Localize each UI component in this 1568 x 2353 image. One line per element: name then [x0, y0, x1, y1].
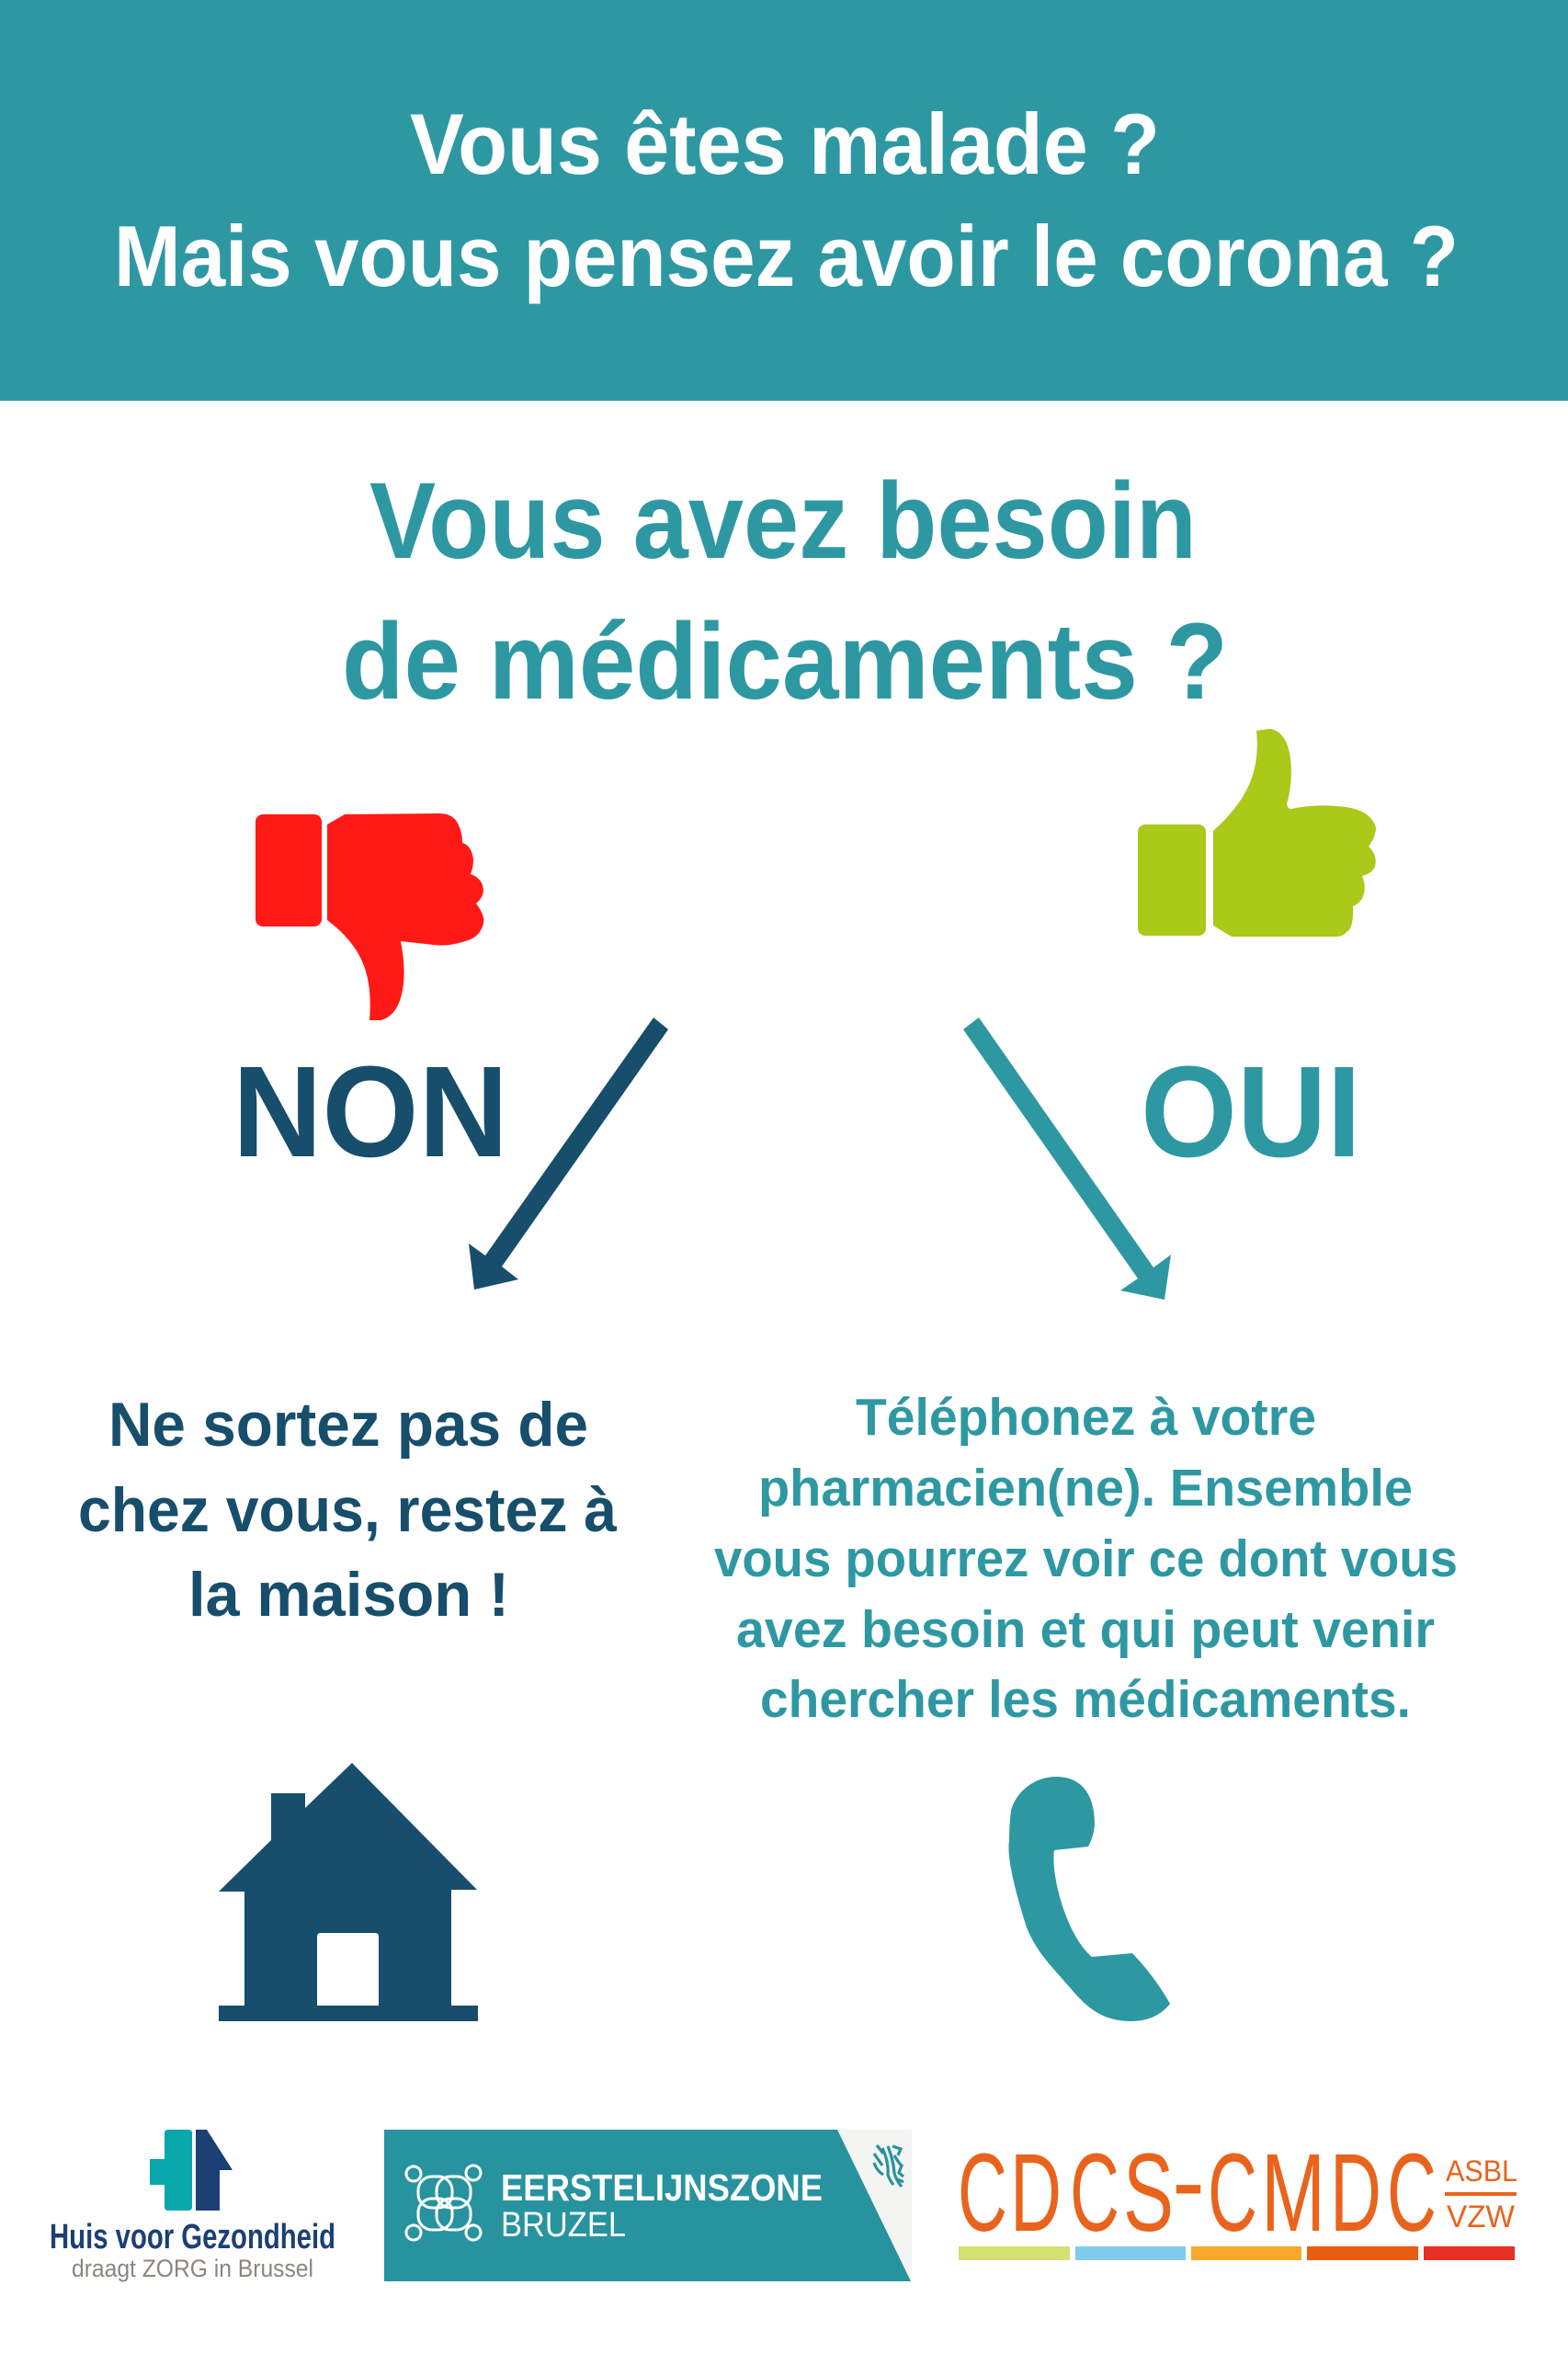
label: NON: NON	[233, 1039, 508, 1184]
text block: call the pharmacist: pharmacien(ne). Ensemble	[758, 1459, 1413, 1518]
text block: call the pharmacist: vous pourrez voir ce dont vous	[714, 1529, 1458, 1588]
logo: Eerstelijnszone Bruzel: BRUZEL	[501, 2206, 626, 2245]
logo mark	[150, 2130, 233, 2211]
logo: Huis voor Gezondheid: Huis voor Gezondheid	[50, 2218, 335, 2256]
logo: Huis voor Gezondheid: draagt ZORG in Brussel	[72, 2255, 313, 2282]
logo: CDCS-CMDC: D	[1330, 2130, 1381, 2255]
question heading: de médicaments ?	[342, 601, 1228, 722]
logo: CDCS-CMDC: C	[1387, 2130, 1437, 2255]
icon: thumbs up	[1138, 729, 1376, 937]
icon: house	[219, 1763, 478, 2021]
icon: Flemish lion	[874, 2145, 903, 2187]
logo mark: network of circles	[406, 2165, 481, 2240]
question heading	[342, 460, 1228, 722]
header banner	[0, 0, 1568, 401]
text block: call the pharmacist: Téléphonez à votre	[856, 1388, 1316, 1447]
text block: call the pharmacist: avez besoin et qui peut venir	[736, 1600, 1435, 1659]
logo: CDCS-CMDC: M	[1261, 2130, 1325, 2255]
logo: CDCS-CMDC: S	[1123, 2130, 1174, 2255]
logo: CDCS-CMDC: C	[958, 2130, 1007, 2255]
title: Vous êtes malade ?	[410, 96, 1160, 192]
title: Mais vous pensez avoir le corona ?	[114, 208, 1459, 304]
logo: Huis voor Gezondheid	[50, 2130, 335, 2282]
title	[114, 96, 1459, 304]
text block: call the pharmacist: chercher les médicaments.	[760, 1670, 1411, 1729]
logo: CDCS-CMDC: VZW	[1447, 2200, 1515, 2234]
logo: CDCS-CMDC: -	[1172, 2118, 1205, 2243]
text block: stay at home	[78, 1390, 617, 1630]
text block: call the pharmacist	[714, 1388, 1458, 1729]
text block: stay at home: Ne sortez pas de	[108, 1390, 588, 1460]
arrow: to NON	[469, 1017, 668, 1290]
icon: thumbs down	[256, 813, 483, 1020]
arrow: to OUI	[963, 1017, 1171, 1300]
logo: CDCS-CMDC: D	[1010, 2130, 1062, 2255]
logo: Eerstelijnszone Bruzel: EERSTELIJNSZONE	[501, 2166, 823, 2209]
logo: CDCS-CMDC: C	[1208, 2130, 1257, 2255]
logo: CDCS-CMDC: ASBL	[1446, 2154, 1517, 2188]
text block: stay at home: chez vous, restez à	[78, 1475, 617, 1545]
colour stripes	[959, 2246, 1515, 2260]
text block: stay at home: la maison !	[188, 1560, 509, 1630]
icon: telephone	[1008, 1777, 1170, 2021]
logo: CDCS-CMDC: C	[1070, 2130, 1119, 2255]
logo: CDCS-CMDC	[958, 2118, 1517, 2260]
logo: Eerstelijnszone Bruzel	[384, 2130, 912, 2281]
label: OUI: OUI	[1141, 1039, 1361, 1184]
question heading: Vous avez besoin	[369, 460, 1197, 582]
